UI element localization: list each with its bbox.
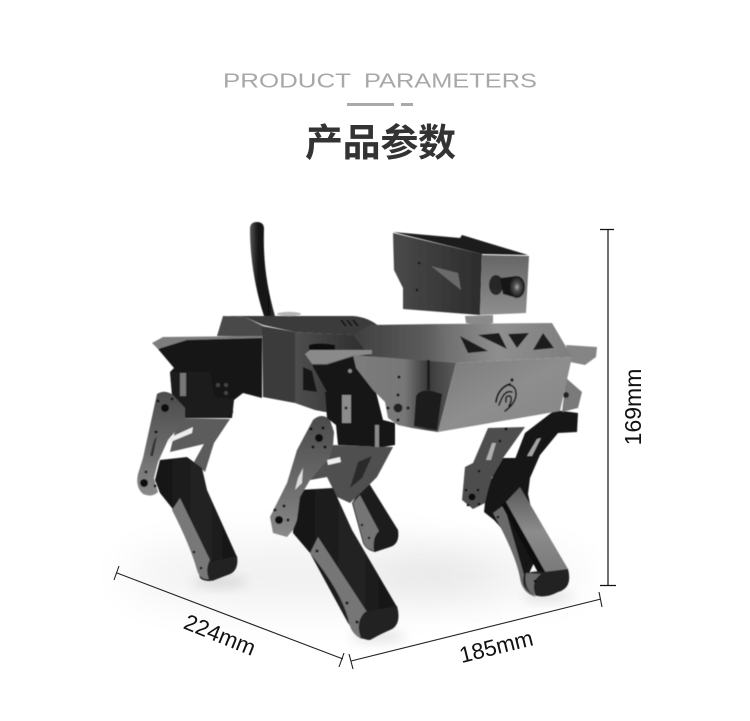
rear link <box>170 418 230 472</box>
right lower leg <box>484 473 540 582</box>
width label: 185mm <box>457 626 536 668</box>
front wing plate <box>305 350 372 364</box>
camera side <box>393 233 482 315</box>
rear body <box>152 312 380 418</box>
near lower leg <box>293 488 398 640</box>
front hex face <box>438 357 572 432</box>
height label: 169mm <box>620 369 646 445</box>
front body <box>305 315 597 447</box>
right wing <box>566 345 597 365</box>
english title <box>223 70 537 92</box>
logo icon <box>496 378 516 411</box>
right thigh <box>462 427 525 509</box>
front top plate <box>353 324 458 364</box>
right link <box>492 410 578 494</box>
near link <box>310 445 393 503</box>
near front leg <box>270 416 398 640</box>
tail <box>250 222 275 316</box>
neck mount <box>465 315 493 324</box>
rear top plate <box>223 316 380 335</box>
camera front <box>480 255 529 315</box>
camera <box>393 232 529 315</box>
height dimension <box>600 229 616 586</box>
english title: PARAMETERS <box>364 70 537 92</box>
chinese heading: 产品参数 <box>305 123 456 165</box>
rear thigh <box>137 392 185 496</box>
front wing underside <box>312 357 372 392</box>
title divider <box>347 103 413 106</box>
depth dimension <box>114 566 344 667</box>
vent cutouts <box>460 333 554 353</box>
rear servo <box>170 372 233 418</box>
ground shadows <box>120 541 590 642</box>
joint plate <box>386 376 410 422</box>
lens <box>489 275 525 298</box>
near thigh <box>270 416 334 537</box>
rear lower leg <box>155 457 237 581</box>
depth label: 224mm <box>180 609 259 661</box>
width dimension <box>349 592 602 669</box>
right front leg <box>462 410 578 597</box>
camera top <box>393 232 528 255</box>
robot dog <box>137 222 597 640</box>
rear wing plate <box>152 336 262 349</box>
rear side housing <box>295 332 372 412</box>
rear near leg <box>137 392 237 581</box>
rear vertical plate <box>262 326 295 403</box>
near servos <box>325 388 395 447</box>
front side panel <box>353 355 456 432</box>
english title: PRODUCT <box>223 70 352 92</box>
rear wing underside <box>158 338 262 418</box>
far rear leg <box>352 480 398 552</box>
front servo cap <box>414 391 442 430</box>
right joint <box>562 378 582 412</box>
front hex chamfer <box>438 323 572 363</box>
